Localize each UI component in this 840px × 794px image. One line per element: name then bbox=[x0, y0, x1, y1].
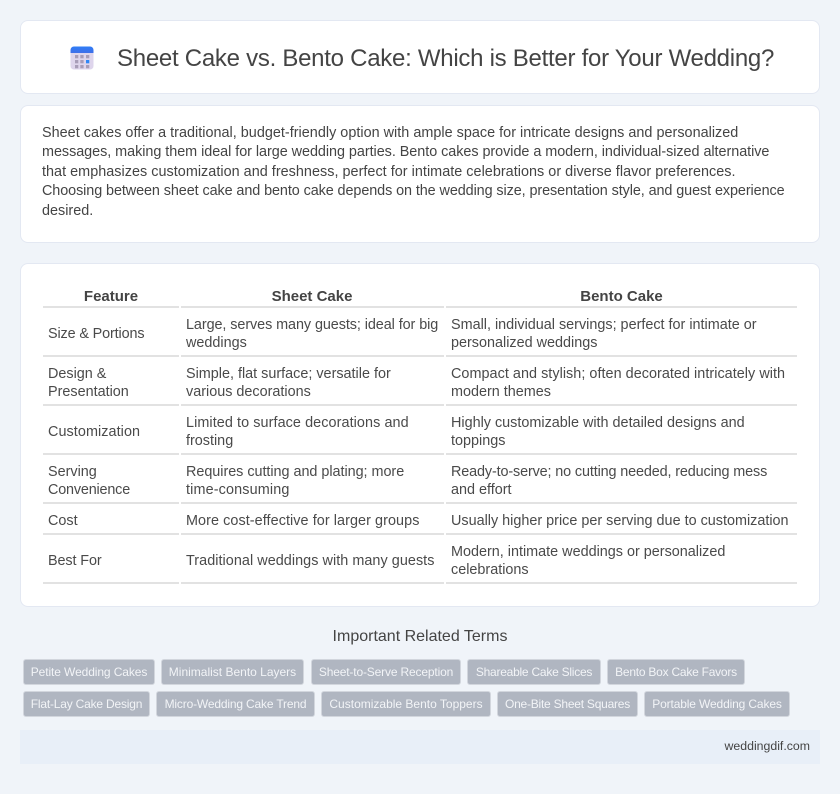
panel: comparison table bbox=[20, 263, 820, 607]
intro paragraph: desired. bbox=[42, 203, 93, 219]
tag: Customizable Bento Toppers bbox=[329, 697, 483, 711]
intro paragraph: that emphasizes customization and freshness, perfect for intimate celebrations or diverse flavor preferences. bbox=[42, 164, 736, 180]
row 1 sheet cake: weddings bbox=[186, 335, 247, 351]
row 2 bento cake bbox=[451, 366, 785, 400]
row 4 bento cake bbox=[451, 464, 767, 498]
row 2 feature: Presentation bbox=[48, 384, 129, 400]
intro paragraph bbox=[42, 125, 785, 219]
row 4 feature: Convenience bbox=[48, 482, 130, 498]
row 3 feature: Customization bbox=[48, 424, 140, 440]
row 5 sheet cake: More cost-effective for larger groups bbox=[186, 513, 419, 529]
icon: calendar bbox=[70, 46, 94, 70]
row 1 bento cake bbox=[451, 317, 757, 351]
row 4 sheet cake: Requires cutting and plating; more bbox=[186, 464, 404, 480]
tag bbox=[321, 691, 491, 717]
panel: intro text bbox=[20, 105, 820, 243]
tag: One-Bite Sheet Squares bbox=[505, 697, 630, 711]
row 3 bento cake bbox=[451, 415, 745, 449]
tag bbox=[161, 659, 304, 685]
row 5 feature: Cost bbox=[48, 513, 78, 529]
intro paragraph: messages, making them ideal for large wedding parties. Bento cakes provide a modern, individual-sized alternative bbox=[42, 144, 769, 160]
row 6 bento cake: Modern, intimate weddings or personalized bbox=[451, 544, 725, 560]
row 2 feature: Design & bbox=[48, 366, 106, 382]
row 6 sheet cake: Traditional weddings with many guests bbox=[186, 553, 434, 569]
row 2 sheet cake bbox=[186, 366, 391, 400]
row 6 feature: Best For bbox=[48, 553, 102, 569]
tag bbox=[497, 691, 638, 717]
footer source: weddingdif.com bbox=[725, 739, 810, 753]
row 3 sheet cake: frosting bbox=[186, 433, 233, 449]
row 4 bento cake: Ready-to-serve; no cutting needed, reducing mess bbox=[451, 464, 767, 480]
column header: Sheet Cake: Sheet Cake bbox=[272, 288, 352, 305]
row 3 bento cake: toppings bbox=[451, 433, 505, 449]
tag: Minimalist Bento Layers bbox=[169, 665, 296, 679]
row 4 sheet cake bbox=[186, 464, 404, 498]
tag: Portable Wedding Cakes bbox=[652, 697, 782, 711]
tag: Micro-Wedding Cake Trend bbox=[165, 697, 306, 711]
tag: Shareable Cake Slices bbox=[476, 665, 592, 679]
tag bbox=[607, 659, 745, 685]
intro paragraph: Choosing between sheet cake and bento cake depends on the wedding size, presentation style, and guest experience bbox=[42, 183, 785, 199]
row 2 sheet cake: various decorations bbox=[186, 384, 311, 400]
row 5 bento cake: Usually higher price per serving due to customization bbox=[451, 513, 789, 529]
row 2 bento cake: Compact and stylish; often decorated intricately with bbox=[451, 366, 785, 382]
tag: Petite Wedding Cakes bbox=[31, 665, 147, 679]
heading: related terms: Important Related Terms bbox=[333, 628, 507, 645]
tag bbox=[311, 659, 461, 685]
row 6 bento cake bbox=[451, 544, 725, 578]
tag bbox=[644, 691, 790, 717]
row 4 bento cake: and effort bbox=[451, 482, 512, 498]
tag bbox=[23, 659, 155, 685]
tag: Bento Box Cake Favors bbox=[615, 665, 737, 679]
row 2 bento cake: modern themes bbox=[451, 384, 551, 400]
tag: Flat-Lay Cake Design bbox=[31, 697, 142, 711]
row 1 sheet cake: Large, serves many guests; ideal for big bbox=[186, 317, 438, 333]
tag: Sheet-to-Serve Reception bbox=[319, 665, 453, 679]
footer bar bbox=[20, 730, 820, 764]
row 2 feature bbox=[48, 366, 129, 400]
panel: header bbox=[20, 20, 820, 94]
row 3 sheet cake bbox=[186, 415, 409, 449]
tag bbox=[467, 659, 601, 685]
row 3 sheet cake: Limited to surface decorations and bbox=[186, 415, 409, 431]
column header: Bento Cake: Bento Cake bbox=[580, 288, 663, 305]
row 2 sheet cake: Simple, flat surface; versatile for bbox=[186, 366, 391, 382]
tag bbox=[156, 691, 315, 717]
title: Sheet Cake vs. Bento Cake: Which is Better for Your Wedding? bbox=[117, 45, 774, 72]
row 4 sheet cake: time-consuming bbox=[186, 482, 290, 498]
row 1 bento cake: personalized weddings bbox=[451, 335, 597, 351]
row 4 feature bbox=[48, 464, 130, 498]
row 4 feature: Serving bbox=[48, 464, 97, 480]
row 1 bento cake: Small, individual servings; perfect for intimate or bbox=[451, 317, 757, 333]
tag bbox=[23, 691, 150, 717]
column header: Feature: Feature bbox=[84, 288, 138, 305]
row 1 feature: Size & Portions bbox=[48, 326, 144, 342]
row 6 bento cake: celebrations bbox=[451, 562, 529, 578]
intro paragraph: Sheet cakes offer a traditional, budget-friendly option with ample space for intricate designs and personalized bbox=[42, 125, 738, 141]
row 3 bento cake: Highly customizable with detailed designs and bbox=[451, 415, 745, 431]
row 1 sheet cake bbox=[186, 317, 438, 351]
